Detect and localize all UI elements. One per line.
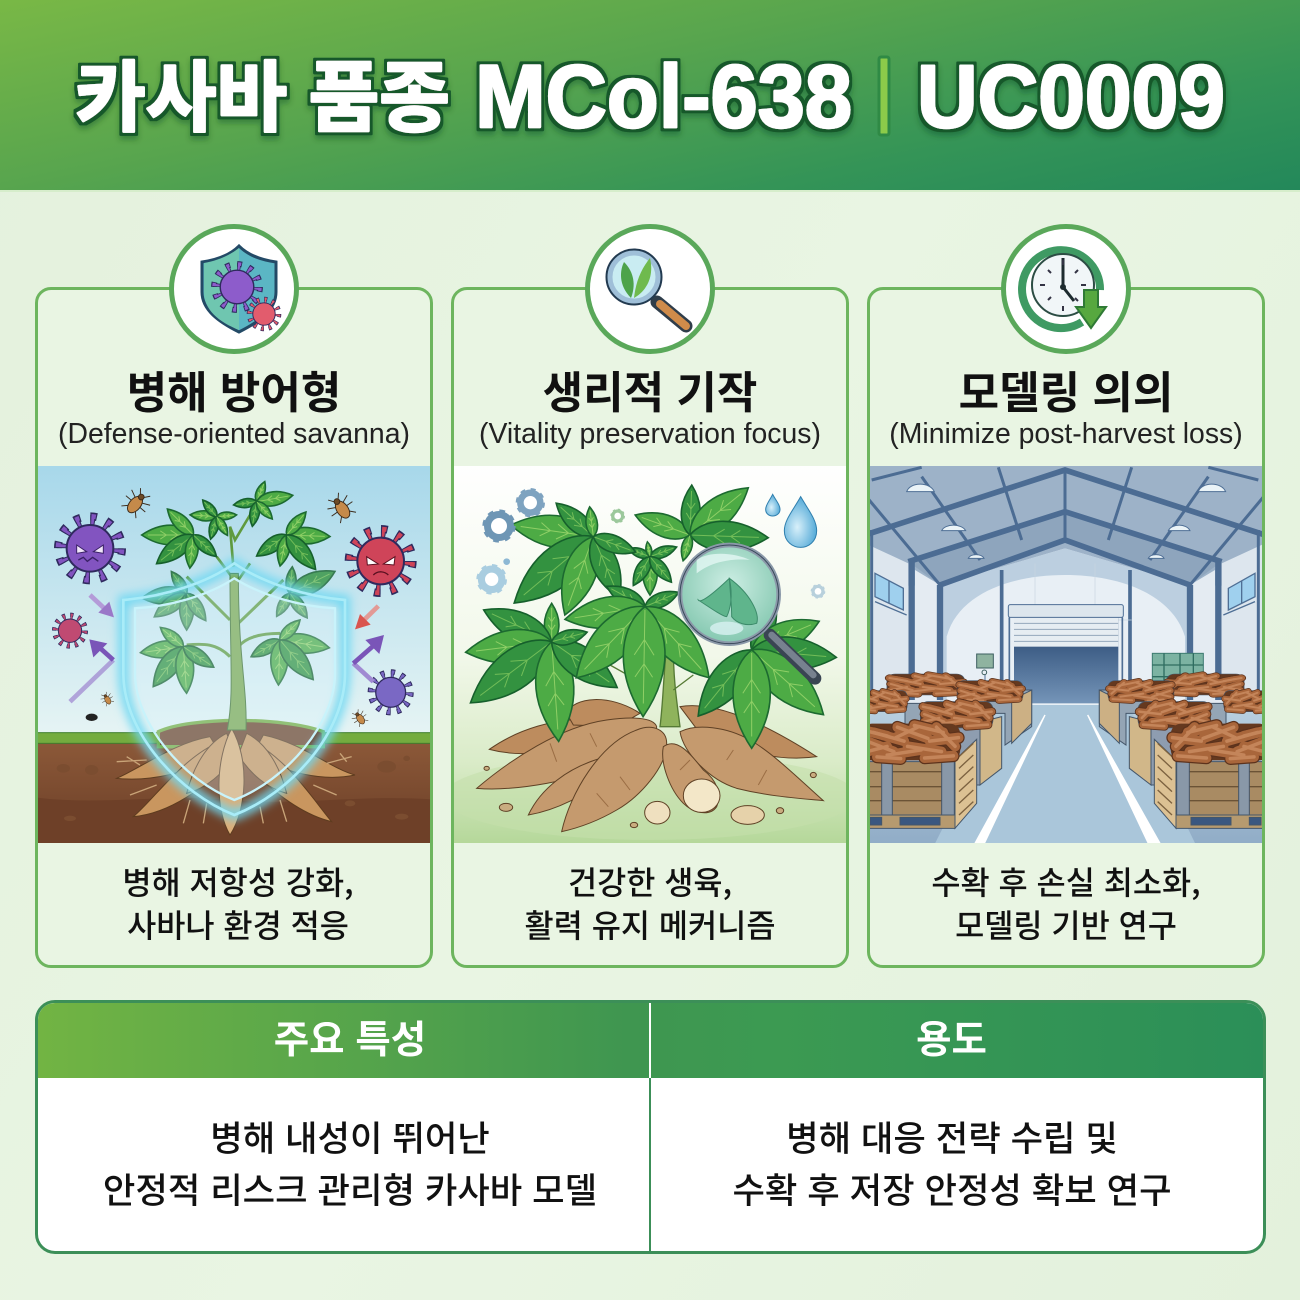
water drops bbox=[766, 494, 817, 547]
icon: shield with viruses bbox=[169, 224, 299, 354]
subtitle: (Defense-oriented savanna) bbox=[58, 418, 410, 450]
header: key traits: 주요 특성 bbox=[274, 1009, 426, 1065]
icon: magnifier with leaf bbox=[585, 224, 715, 354]
description bbox=[122, 858, 354, 947]
summary table bbox=[35, 1000, 1266, 1254]
lamps bbox=[907, 484, 1226, 558]
cell: use text: 수확 후 저장 안정성 확보 연구 bbox=[732, 1163, 1172, 1214]
icon: clock with down arrow bbox=[1001, 224, 1131, 354]
illustration: cassava with magnifier bbox=[454, 466, 846, 843]
title: MCol-638 bbox=[475, 46, 852, 146]
description: 사바나 환경 적응 bbox=[127, 901, 349, 947]
header: use: 용도 bbox=[916, 1009, 987, 1065]
stem bbox=[187, 577, 283, 657]
description bbox=[525, 858, 775, 947]
magnifier bbox=[680, 545, 815, 678]
floor bbox=[865, 705, 1265, 850]
description bbox=[931, 858, 1201, 947]
right crates bbox=[1099, 674, 1277, 828]
panel: physiology bbox=[451, 287, 849, 968]
trusses bbox=[865, 467, 1265, 705]
title: UC0009 bbox=[917, 46, 1225, 146]
cell: traits text: 병해 내성이 뛰어난 bbox=[210, 1111, 490, 1162]
panel: defense bbox=[35, 287, 433, 968]
glowing shield bbox=[123, 563, 345, 815]
panel: modeling bbox=[867, 287, 1265, 968]
cell: use text: 병해 대응 전략 수립 및 bbox=[786, 1111, 1118, 1162]
heading: 생리적 기작 bbox=[543, 357, 757, 421]
viruses bbox=[54, 516, 413, 713]
arrows bbox=[70, 595, 384, 702]
cell: use text bbox=[732, 1111, 1172, 1214]
left crates bbox=[854, 674, 1032, 828]
roller door bbox=[1008, 605, 1123, 703]
cell: traits text: 안정적 리스크 관리형 카사바 모델 bbox=[103, 1163, 597, 1214]
gears bbox=[479, 491, 824, 597]
description: 활력 유지 메커니즘 bbox=[525, 901, 775, 947]
tubers bbox=[477, 700, 823, 832]
subtitle: (Vitality preservation focus) bbox=[479, 418, 821, 450]
cell: traits text bbox=[103, 1111, 597, 1214]
title: 카사바 품종 bbox=[75, 37, 450, 148]
subtitle: (Minimize post-harvest loss) bbox=[889, 418, 1243, 450]
sign and stacked boxes bbox=[977, 653, 1203, 690]
description: 수확 후 손실 최소화, bbox=[931, 858, 1201, 904]
illustration: shielded cassava plant bbox=[38, 466, 430, 843]
leaves bbox=[459, 477, 838, 748]
roots bbox=[117, 728, 355, 835]
description: 모델링 기반 연구 bbox=[955, 901, 1177, 947]
table header bar bbox=[38, 1003, 1263, 1078]
description: 건강한 생육, bbox=[568, 858, 732, 904]
cassava leaves bbox=[139, 480, 339, 694]
bugs bbox=[86, 484, 370, 728]
title bbox=[72, 37, 1228, 148]
column divider bbox=[649, 1003, 651, 1251]
heading: 병해 방어형 bbox=[127, 357, 341, 421]
description: 병해 저항성 강화, bbox=[122, 858, 354, 904]
illustration: storage warehouse bbox=[870, 466, 1262, 843]
stem bbox=[610, 647, 693, 727]
heading: 모델링 의의 bbox=[959, 357, 1173, 421]
header banner bbox=[0, 0, 1300, 192]
